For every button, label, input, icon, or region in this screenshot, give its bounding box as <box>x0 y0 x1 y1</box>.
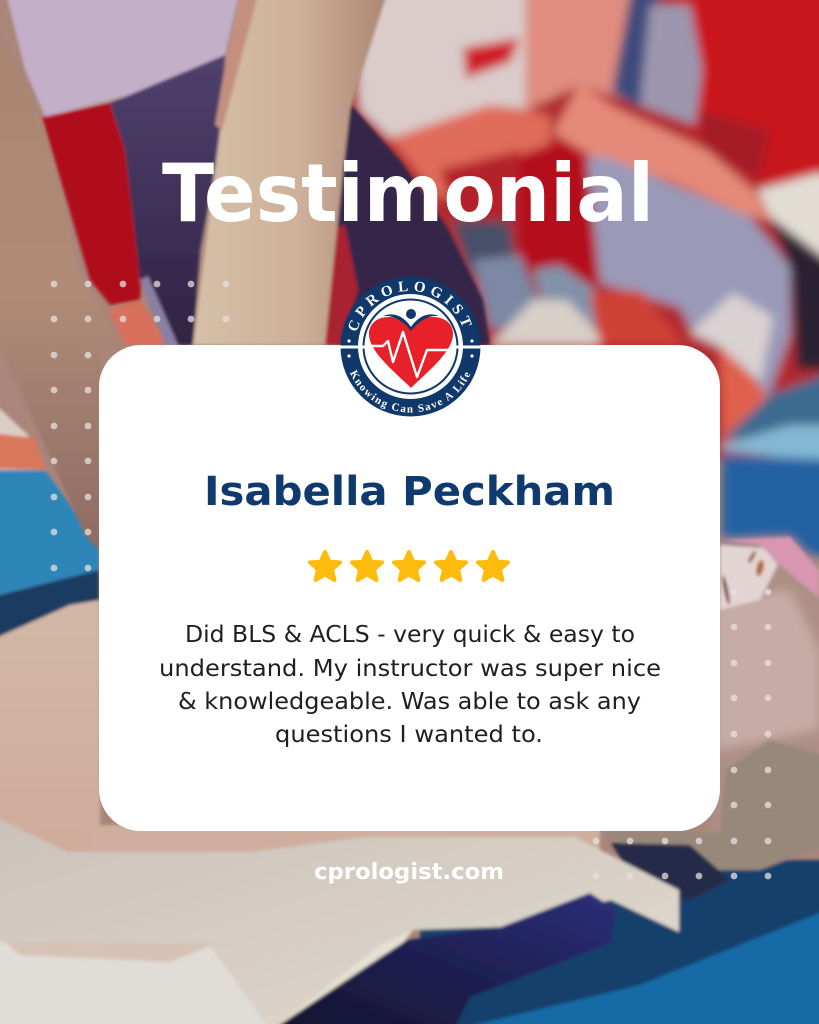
left torso <box>0 600 100 860</box>
centre arm <box>193 0 388 345</box>
navy clothing <box>272 893 616 1024</box>
right blue <box>722 370 819 440</box>
reviewer name: Isabella Peckham <box>204 469 615 515</box>
hair <box>600 740 819 870</box>
shirt <box>0 810 679 1024</box>
testimonial text: & knowledgeable. Was able to ask any <box>178 689 641 715</box>
testimonial text: questions I wanted to. <box>275 722 543 748</box>
lavender clothes <box>587 157 790 400</box>
logo: CPROLOGIST badge: Knowing Can Save A Life <box>350 370 470 412</box>
title: Testimonial <box>162 147 654 240</box>
mannequin face base <box>700 537 819 860</box>
red trousers <box>42 103 142 305</box>
left arm <box>0 43 99 552</box>
salmon chest <box>390 105 550 200</box>
grey-blue clothes <box>453 220 515 275</box>
pale corner <box>757 173 819 270</box>
pink panel <box>525 0 640 110</box>
logo heart <box>369 317 453 388</box>
testimonial text: understand. My instructor was super nice <box>159 656 661 682</box>
purple shirt <box>110 55 225 345</box>
dark shape <box>770 217 819 370</box>
dot pattern: upper left <box>51 281 229 571</box>
pale sheet <box>350 0 530 140</box>
testimonial text: Did BLS & ACLS - very quick & easy to <box>185 622 635 648</box>
testimonial text <box>159 622 661 748</box>
logo: CPROLOGIST badge <box>340 276 480 416</box>
mannequin nose <box>720 545 778 610</box>
five star rating <box>310 552 508 580</box>
logo figure <box>383 309 439 331</box>
website url: cprologist.com <box>314 860 504 885</box>
dark sleeve <box>325 100 490 345</box>
dot pattern: lower right <box>593 589 771 879</box>
red tag <box>463 38 520 78</box>
red folds <box>590 290 685 345</box>
cream folds <box>490 300 610 345</box>
left blue mat <box>0 470 99 610</box>
top-left shirt <box>5 0 240 117</box>
forearm <box>553 83 770 220</box>
red fabric top right <box>675 0 819 185</box>
logo ring text: CPROLOGIST <box>348 282 472 330</box>
strap <box>612 0 662 108</box>
testimonial card <box>99 345 720 831</box>
lower right blue <box>420 860 819 1024</box>
logo pulse line <box>369 332 452 377</box>
